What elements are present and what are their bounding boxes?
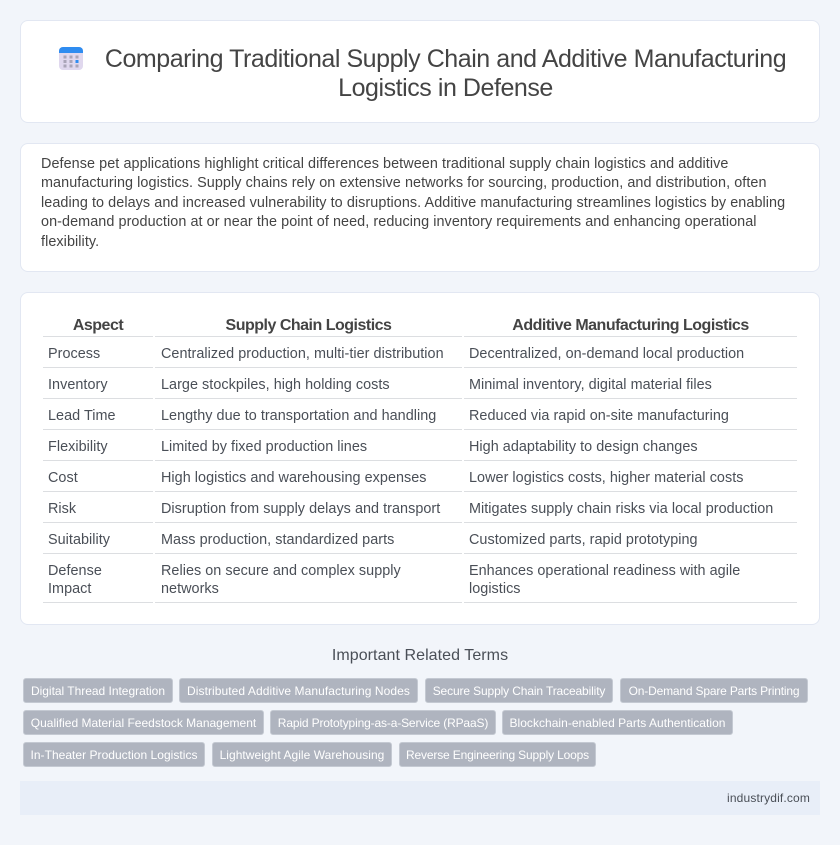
row: Flexibility: Flexibility: [48, 439, 108, 455]
title: Comparing Traditional Supply Chain and Additive Manufacturing: [105, 45, 786, 73]
row: Defense Impact: logistics: [469, 581, 521, 597]
table header: Supply Chain Logistics: [226, 317, 391, 334]
footer bar: [20, 781, 820, 815]
row: Inventory: [48, 377, 712, 393]
comparison table: [43, 317, 797, 603]
row: Defense Impact: [48, 563, 740, 597]
row: Risk: [48, 501, 773, 517]
related term tags: In-Theater Production Logistics: [30, 748, 198, 762]
row: Process: Process: [48, 346, 100, 362]
related term tags: Digital Thread Integration: [31, 684, 165, 698]
intro paragraph: on-demand production at or near the point of need, reducing inventory requirements and enhancing operational: [41, 214, 757, 230]
row: Defense Impact: Enhances operational readiness with agile: [469, 563, 740, 579]
intro paragraph: manufacturing logistics. Supply chains rely on extensive networks for sourcing, production, and distribution, often: [41, 175, 767, 191]
related term tags: On-Demand Spare Parts Printing: [629, 684, 799, 698]
row: Inventory: Minimal inventory, digital material files: [469, 377, 712, 393]
table header: Additive Manufacturing Logistics: [512, 317, 749, 334]
related term tags: Qualified Material Feedstock Management: [31, 716, 256, 730]
related term tags: [23, 678, 808, 767]
row: Suitability: [48, 532, 698, 548]
row: Flexibility: [48, 439, 698, 455]
row: Cost: Lower logistics costs, higher material costs: [469, 470, 744, 486]
table card: [20, 292, 820, 625]
related term tags: Distributed Additive Manufacturing Nodes: [187, 684, 410, 698]
row: Inventory: Inventory: [48, 377, 108, 393]
header card: [20, 20, 820, 123]
related terms heading: Important Related Terms: [332, 647, 508, 664]
row: Process: Centralized production, multi-tier distribution: [161, 346, 444, 362]
related term tags: Secure Supply Chain Traceability: [433, 684, 605, 698]
footer source: industrydif.com: [727, 791, 810, 805]
row: Defense Impact: Defense: [48, 563, 102, 579]
title: Logistics in Defense: [338, 74, 553, 102]
row: Process: Decentralized, on-demand local production: [469, 346, 744, 362]
row: Suitability: Suitability: [48, 532, 110, 548]
intro paragraph: flexibility.: [41, 234, 99, 250]
row: Cost: Cost: [48, 470, 78, 486]
related term tags: Reverse Engineering Supply Loops: [406, 748, 589, 762]
table header: [73, 317, 749, 334]
related term tags: Lightweight Agile Warehousing: [220, 748, 384, 762]
row: Lead Time: [48, 408, 729, 424]
row: Lead Time: Reduced via rapid on-site manufacturing: [469, 408, 729, 424]
icon: calendar grid: [59, 47, 83, 70]
row: Risk: Mitigates supply chain risks via local production: [469, 501, 773, 517]
related term tags: Blockchain-enabled Parts Authentication: [510, 716, 725, 730]
row: Process: [48, 346, 744, 362]
row: Risk: Risk: [48, 501, 76, 517]
row: Flexibility: Limited by fixed production lines: [161, 439, 367, 455]
row: Defense Impact: networks: [161, 581, 219, 597]
row: Cost: High logistics and warehousing expenses: [161, 470, 427, 486]
table header: Aspect: [73, 317, 123, 334]
row: Defense Impact: Impact: [48, 581, 91, 597]
intro paragraph: leading to delays and increased vulnerability to disruptions. Additive manufacturing streamlines logistics by enabling: [41, 195, 785, 211]
intro paragraph: Defense pet applications highlight critical differences between traditional supply chain logistics and additive: [41, 156, 728, 172]
row: Suitability: Customized parts, rapid prototyping: [469, 532, 698, 548]
row: Lead Time: Lead Time: [48, 408, 116, 424]
intro paragraph: [41, 156, 785, 250]
row: Lead Time: Lengthy due to transportation and handling: [161, 408, 436, 424]
title: [105, 45, 786, 102]
row: Defense Impact: Relies on secure and complex supply: [161, 563, 401, 579]
row: Suitability: Mass production, standardized parts: [161, 532, 394, 548]
row: Risk: Disruption from supply delays and transport: [161, 501, 440, 517]
row: Cost: [48, 470, 744, 486]
row: Flexibility: High adaptability to design changes: [469, 439, 698, 455]
related term tags: Rapid Prototyping-as-a-Service (RPaaS): [278, 716, 488, 730]
row: Inventory: Large stockpiles, high holding costs: [161, 377, 390, 393]
intro card: [20, 143, 820, 272]
